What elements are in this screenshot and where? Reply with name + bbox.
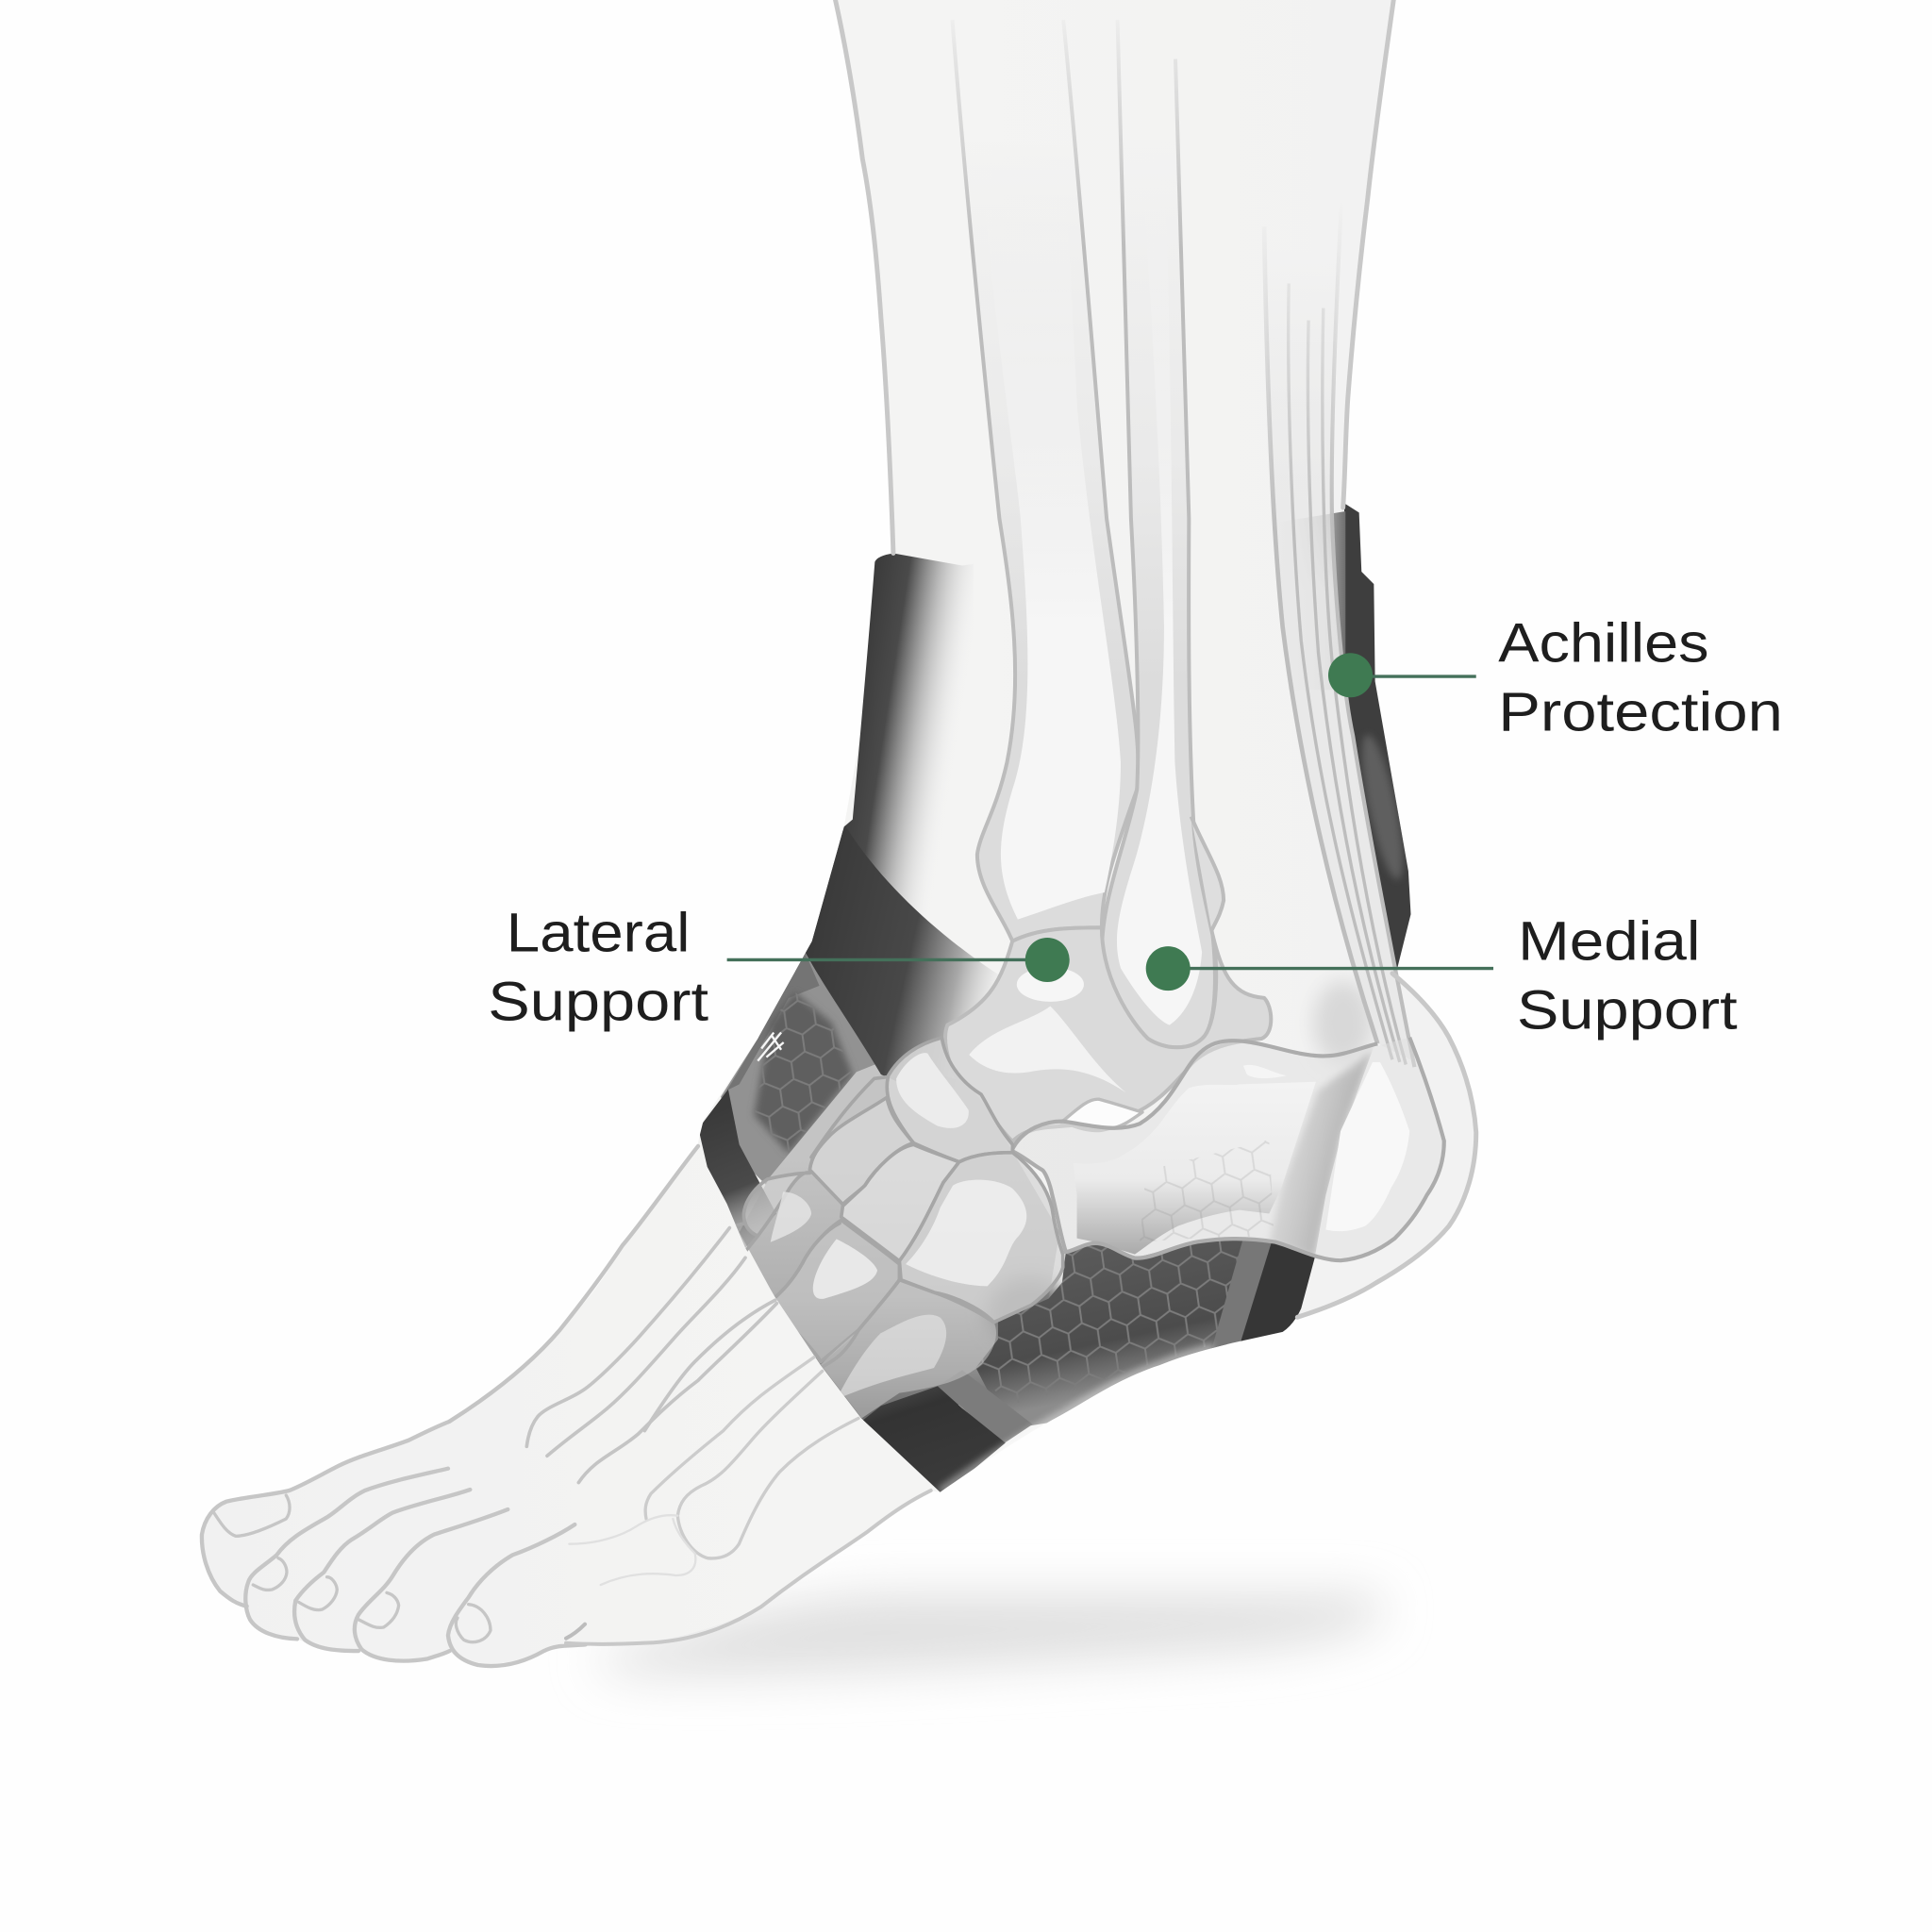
- dorsal foot edge and metatarsal lines: [450, 1146, 776, 1483]
- bone: second metatarsal base: [771, 1220, 899, 1361]
- metatarsal connecting lines: [733, 1224, 840, 1302]
- bone: lateral metatarsal base: [743, 1173, 809, 1236]
- third metatarsal line: [644, 1300, 775, 1431]
- brace front dark edge: [700, 1089, 776, 1248]
- dot: medial: [1146, 946, 1191, 991]
- calcaneus heel bone: [1011, 1038, 1444, 1260]
- sole edge: [566, 1491, 931, 1644]
- brace back lighter patch: [1360, 734, 1406, 880]
- label: medial support: Medial: [1518, 910, 1700, 972]
- brace grey strip beside strap: [955, 1374, 1032, 1443]
- joint white gap: [1061, 1099, 1142, 1128]
- achilles tendon: [1264, 191, 1414, 1067]
- calcaneus outline: [1011, 1038, 1444, 1260]
- fourth toe line: [355, 1509, 508, 1661]
- bone: cuboid: [899, 1153, 1063, 1323]
- brace speckled hexagon panel: [754, 991, 853, 1154]
- leader line: medial: [1185, 967, 1493, 970]
- callout: lateral support: [488, 902, 1070, 1032]
- callout: medial support: [1146, 910, 1738, 1041]
- bone: fibular bump: [1191, 817, 1224, 930]
- second metatarsal line: [547, 1257, 745, 1456]
- midfoot bones clipped to the brace: [733, 1038, 1063, 1418]
- third toenail: [299, 1577, 337, 1610]
- label: lateral support: Lateral: [507, 902, 690, 963]
- faint toe base line: [601, 1519, 695, 1585]
- dot: achilles: [1328, 653, 1373, 697]
- bone lower outline: [821, 1280, 993, 1368]
- brace outer grey strip: [727, 949, 820, 1091]
- dot: lateral: [1025, 938, 1070, 982]
- leader line: lateral: [727, 958, 1029, 961]
- brace heel grey wash: [1269, 1050, 1373, 1258]
- leg left edge: [836, 0, 893, 553]
- second toenail: [253, 1558, 287, 1590]
- bone highlight: talus: [969, 1007, 1126, 1092]
- brace mid grey panel: [721, 953, 875, 1185]
- brace heel grey strip: [1211, 1239, 1274, 1351]
- bone highlight: lower metatarsal base: [837, 1315, 946, 1399]
- brace heel dark end: [1240, 1242, 1316, 1345]
- bone highlight: second metatarsal base: [813, 1239, 877, 1299]
- calcaneus faint hexagons: [1140, 1140, 1274, 1242]
- callout: achilles protection: [1328, 612, 1783, 743]
- dorsal forefoot edge and first toe: [202, 1422, 450, 1607]
- calcaneus body: [1011, 1038, 1444, 1260]
- bone highlight: lateral shaft: [980, 140, 1121, 920]
- brace logo mark: [758, 1033, 784, 1061]
- small white sliver: [1243, 1065, 1287, 1078]
- bone highlight: lateral metatarsal base: [771, 1191, 811, 1242]
- bone: lateral shaft: [952, 20, 1139, 941]
- brace sole dark panel: [975, 1239, 1247, 1429]
- leader line: achilles: [1370, 675, 1476, 677]
- label: medial support: Support: [1517, 980, 1738, 1041]
- label: achilles protection: Achilles: [1498, 612, 1709, 674]
- brace toe-side strap: [857, 1386, 1006, 1497]
- brace soft lower edge: [941, 1348, 1214, 1492]
- brace upper collar: [795, 554, 968, 972]
- bone: upper cuneiform: [809, 1097, 913, 1205]
- sole and fifth metatarsal: [566, 1357, 931, 1644]
- brace sole hexagon texture: [975, 1241, 1238, 1393]
- fifth toenail: [456, 1605, 491, 1642]
- third toe line: [294, 1490, 470, 1651]
- fifth toe line: [448, 1524, 586, 1666]
- tendon grey band at brace top: [1307, 511, 1345, 658]
- dorsal edge: [450, 1146, 698, 1422]
- heel white interior: [1325, 1062, 1409, 1231]
- brace midfoot grey wash: [740, 1059, 1059, 1429]
- metatarsal B head: [677, 1371, 858, 1558]
- midfoot bone group: [733, 1038, 1063, 1418]
- label: achilles protection: Protection: [1498, 682, 1783, 743]
- leg and heel outlines: [836, 0, 1476, 1317]
- bone strip to cuneiform: [811, 1077, 887, 1158]
- tendon fill: [1264, 191, 1411, 1059]
- toe notch: [566, 1624, 585, 1639]
- bone: navicular: [887, 1038, 1012, 1162]
- first toenail: [214, 1495, 290, 1536]
- ankle brace: [690, 492, 1436, 1497]
- brace hexagon texture front: [754, 991, 853, 1154]
- brace lateral band: [806, 826, 996, 1081]
- toes: [202, 1422, 586, 1666]
- metatarsal A: [645, 1357, 814, 1519]
- brace wash dark patch near sole: [986, 1274, 1062, 1341]
- bone highlight: medial shaft: [1117, 140, 1202, 1025]
- bone highlight: navicular: [896, 1053, 969, 1128]
- brace back dark panel: [1344, 504, 1411, 972]
- calcaneus highlight: [1074, 1082, 1316, 1255]
- tibia, fibula and talus bones: [945, 20, 1271, 1141]
- bone highlight: cuboid: [906, 1180, 1026, 1286]
- leg right edge: [1343, 0, 1393, 508]
- fourth metatarsal line: [578, 1304, 776, 1483]
- heel outer curve: [1297, 974, 1476, 1317]
- bone: lower metatarsal base: [821, 1280, 996, 1418]
- heel lower shade: [1313, 981, 1373, 1064]
- bone: talus: [945, 927, 1271, 1141]
- second toe line: [245, 1469, 448, 1639]
- fourth toenail: [358, 1592, 399, 1627]
- ground shadow: [591, 1594, 1385, 1675]
- bone: medial shaft: [1102, 20, 1215, 1047]
- leg and foot silhouette: [202, 0, 1476, 1665]
- faint phalanx line: [569, 1515, 677, 1544]
- bone: middle cuneiform: [841, 1144, 959, 1261]
- label: lateral support: Support: [488, 971, 708, 1032]
- lateral joint highlight: [1017, 967, 1084, 1002]
- first metatarsal line: [526, 1228, 729, 1446]
